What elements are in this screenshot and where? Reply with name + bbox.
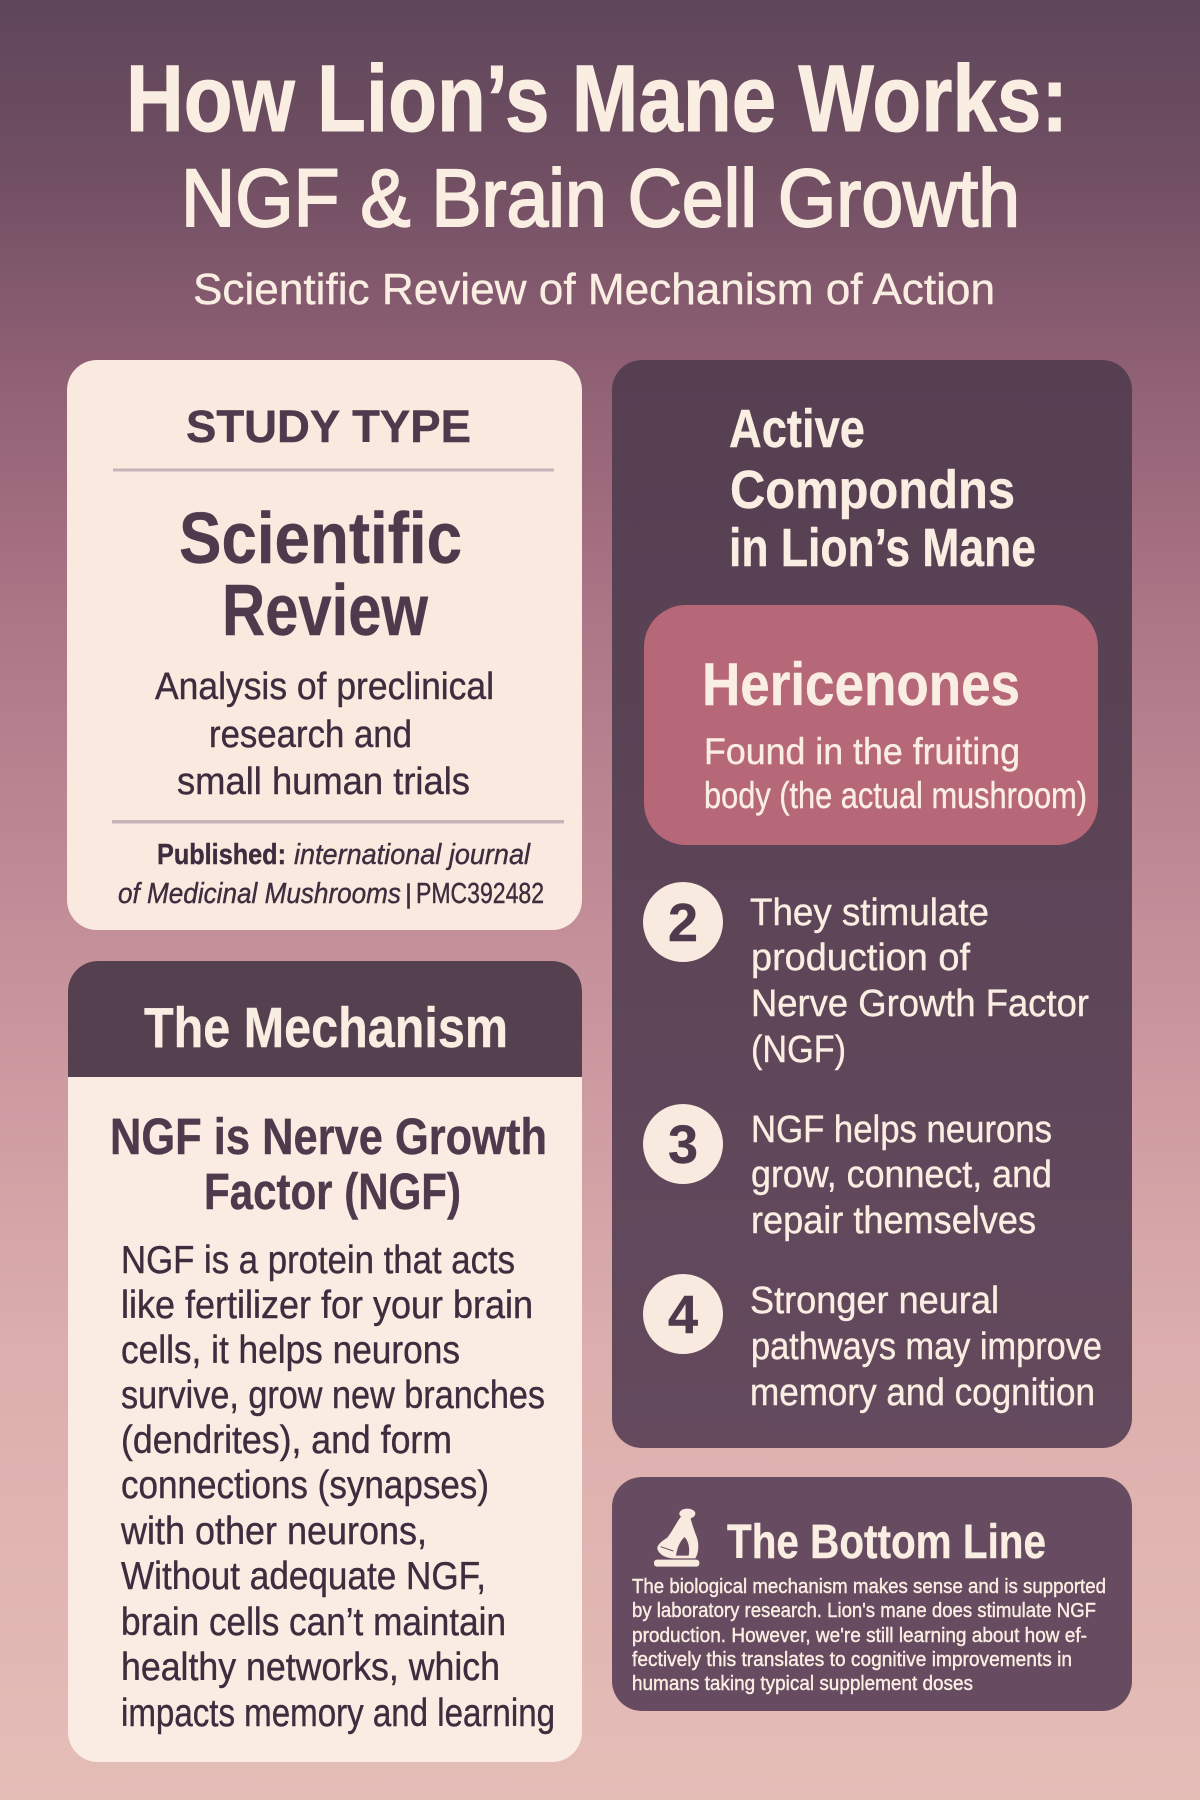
step 2 text: Nerve Growth Factor [751, 983, 1089, 1025]
bottom line text: by laboratory research. Lion's mane does stimulate NGF [632, 1600, 1096, 1622]
number badge 4: 4 [668, 1285, 698, 1345]
title line 2: NGF & Brain Cell Growth [181, 153, 1020, 244]
step 2 text: They stimulate [750, 892, 989, 934]
bottom line text: humans taking typical supplement doses [632, 1673, 973, 1695]
hericenones name: Hericenones [702, 651, 1020, 718]
bottom line text: production. However, we're still learning about how ef- [632, 1625, 1087, 1647]
study type card background [67, 360, 582, 930]
scientific review label: Scientific [179, 499, 462, 579]
NGF explanation text: Without adequate NGF, [121, 1555, 486, 1598]
header: title and subtitle [126, 46, 1068, 314]
step 3 text [751, 1109, 1052, 1242]
mechanism card background [68, 961, 582, 1762]
publication details: Published: [157, 839, 286, 871]
hericenones description: Found in the fruiting [704, 731, 1020, 772]
study description [155, 666, 494, 803]
hericenones description [704, 731, 1087, 816]
subtitle: Scientific Review of Mechanism of Action [193, 265, 995, 314]
bottom line heading: The Bottom Line [727, 1516, 1046, 1569]
number badge 2 [643, 882, 723, 962]
step 4 text: memory and cognition [750, 1372, 1095, 1414]
study type heading: STUDY TYPE [186, 401, 471, 452]
NGF explanation text: connections (synapses) [121, 1464, 489, 1507]
step 4 text: Stronger neural [750, 1280, 999, 1322]
hericenones description: body (the actual mushroom) [704, 775, 1087, 816]
NGF explanation text: with other neurons, [120, 1510, 427, 1553]
publication details: PMC392482 [416, 878, 544, 910]
NGF explanation text: (dendrites), and form [121, 1419, 452, 1462]
active compounds heading: in Lion’s Mane [729, 518, 1036, 578]
step 4 text [750, 1280, 1102, 1414]
bottom line text: fectively this translates to cognitive improvements in [632, 1649, 1072, 1671]
NGF subheading: NGF is Nerve Growth [110, 1108, 547, 1165]
study description: research and [209, 714, 412, 756]
step 4 text: pathways may improve [751, 1326, 1102, 1368]
icon: microscope [654, 1509, 699, 1567]
publication details: | [405, 879, 412, 909]
active compounds heading [729, 399, 1036, 578]
NGF explanation text: healthy networks, which [121, 1646, 500, 1689]
bottom line card background [612, 1477, 1132, 1711]
number badge 3 [643, 1104, 723, 1184]
bottom line text: The biological mechanism makes sense and is supported [632, 1576, 1106, 1598]
NGF explanation text: survive, grow new branches [121, 1374, 545, 1417]
scientific review label: Review [222, 571, 429, 651]
NGF explanation text: cells, it helps neurons [121, 1329, 460, 1372]
publication details: of Medicinal Mushrooms [118, 878, 401, 910]
step 3 text: NGF helps neurons [751, 1109, 1052, 1151]
active compounds heading: Active [729, 399, 865, 459]
NGF explanation text: like fertilizer for your brain [121, 1284, 533, 1327]
panel: the bottom line [612, 1477, 1132, 1711]
step 2 text: production of [751, 937, 970, 979]
bottom line text [632, 1576, 1106, 1695]
number badge 3: 3 [668, 1115, 698, 1175]
publication details: international journal [294, 839, 531, 871]
NGF explanation text: brain cells can’t maintain [121, 1601, 506, 1644]
panel: study type [67, 360, 582, 930]
panel: the mechanism [68, 961, 582, 1762]
mechanism header band [68, 961, 582, 1077]
callout: hericenones [644, 605, 1098, 845]
step 2 text: (NGF) [751, 1029, 846, 1071]
step 3 [643, 1104, 1052, 1242]
NGF explanation text: impacts memory and learning [121, 1692, 555, 1735]
NGF explanation text [120, 1239, 555, 1735]
NGF subheading: Factor (NGF) [204, 1163, 461, 1220]
study description: Analysis of preclinical [155, 666, 494, 708]
panel: active compounds [612, 360, 1132, 1448]
step 4 [643, 1274, 1102, 1414]
hericenones box [644, 605, 1098, 845]
NGF subheading [110, 1108, 547, 1220]
study description: small human trials [177, 761, 470, 803]
NGF explanation text: NGF is a protein that acts [121, 1239, 515, 1282]
scientific review label [179, 499, 462, 651]
step 3 text: grow, connect, and [751, 1154, 1052, 1196]
number badge 2: 2 [668, 893, 698, 953]
step 2 text [750, 892, 1089, 1071]
number badge 4 [643, 1274, 723, 1354]
mechanism heading: The Mechanism [144, 996, 508, 1060]
step 2 [643, 882, 1089, 1071]
publication details [118, 839, 544, 910]
active compounds heading: Compondns [730, 460, 1015, 520]
step 3 text: repair themselves [751, 1200, 1036, 1242]
active compounds card background [612, 360, 1132, 1448]
